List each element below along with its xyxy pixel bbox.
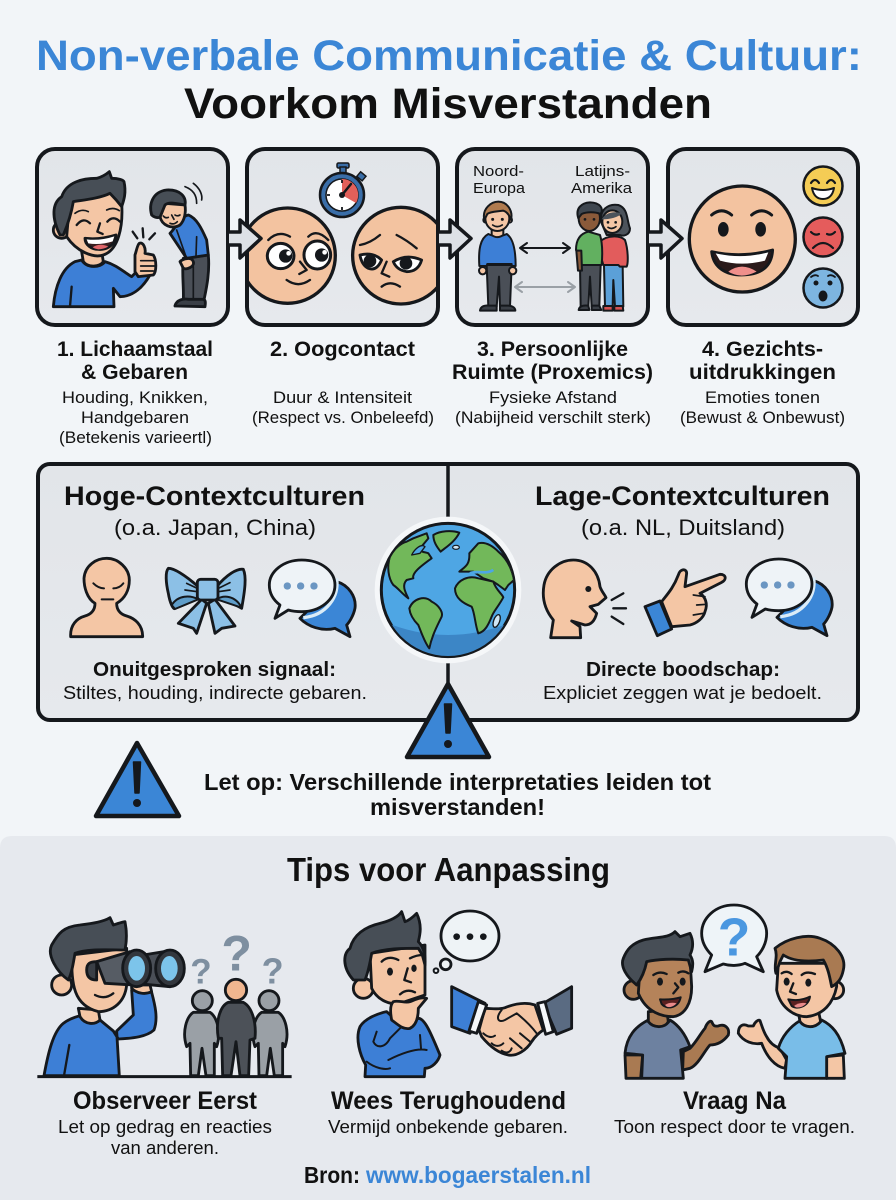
icon: ribbon bow [166, 568, 245, 633]
icon: warning triangle left [96, 743, 179, 816]
panel 3: personal space illustration [457, 149, 648, 325]
tip 1 illustration: observing with binoculars [37, 918, 292, 1077]
arrow: 2 to 3 [439, 220, 471, 258]
icon: handshake [452, 987, 572, 1055]
caption 3: Persoonlijke Ruimte: Fysieke Afstand [489, 389, 617, 407]
caption 4: Gezichtsuitdrukkingen [680, 338, 845, 427]
icon: right person [738, 936, 845, 1078]
arrow: larger distance [515, 282, 575, 292]
icon: pointing hand [645, 570, 725, 636]
heading: high context: (o.a. Japan, China) [114, 515, 316, 540]
tip 2 text: Vermijd onbekende gebaren. [328, 1117, 568, 1137]
title: Voorkom Misverstanden [184, 80, 712, 128]
tip 2 text: Wees Terughoudend [331, 1087, 566, 1115]
icon: question speech bubble [702, 905, 767, 972]
icon: speaking head [543, 560, 626, 638]
source line: www.bogaerstalen.nl [365, 1162, 591, 1188]
tip 1 text: van anderen. [111, 1138, 219, 1158]
caption 4: Gezichtsuitdrukkingen: Emoties tonen [705, 389, 820, 407]
arrow: 1 to 2 [229, 220, 261, 258]
icon: chat bubbles right [746, 559, 832, 636]
warning text: Let op: Verschillende interpretaties leiden tot [204, 769, 711, 795]
icon: surprised emoji [804, 268, 842, 308]
icon: big laughing face [689, 186, 795, 292]
text: low context message: Expliciet zeggen wat je bedoelt. [543, 683, 822, 703]
icon: person standing alone [479, 202, 516, 311]
label: Noord-Europa [473, 163, 526, 197]
icon: left person [622, 932, 729, 1078]
label: Noord-Europa: Noord- [473, 163, 524, 180]
icon: group of people with question marks: ? [262, 950, 284, 991]
caption 4: Gezichtsuitdrukkingen: 4. Gezichts- [702, 338, 823, 361]
icon: bowing person [151, 183, 209, 307]
caption 2: Oogcontact [252, 338, 434, 427]
tip 1 text: Let op gedrag en reacties [58, 1117, 272, 1137]
heading: high context: Hoge-Contextculturen [64, 481, 365, 511]
icon: warning triangle center [407, 684, 489, 757]
icon: group of people with question marks: ? [190, 952, 212, 991]
heading: tips: Tips voor Aanpassing [287, 851, 610, 888]
caption 1: Lichaamstaal & Gebaren: Handgebaren [81, 409, 189, 427]
caption 3: Persoonlijke Ruimte [452, 338, 653, 427]
label: Noord-Europa: Europa [473, 180, 526, 197]
heading: high context [64, 481, 365, 540]
text: high context signal: Stiltes, houding, indirecte gebaren. [63, 683, 367, 703]
icon: globe [375, 517, 521, 663]
icon: two faces [240, 207, 449, 304]
heading: low context [535, 481, 830, 540]
icon: close couple [576, 202, 630, 311]
panel 4: facial expressions illustration [668, 149, 858, 325]
icon: chat bubbles left [269, 560, 355, 637]
tip 3 text: Toon respect door te vragen. [614, 1117, 855, 1137]
caption 2: Oogcontact: Duur & Intensiteit [273, 389, 412, 407]
panel 2: eye contact illustration [240, 149, 449, 325]
caption 4: Gezichtsuitdrukkingen: (Bewust & Onbewust) [680, 409, 845, 427]
tip 1 text: Observeer Eerst [73, 1087, 258, 1115]
icon: thinking man [345, 912, 440, 1077]
icon: question speech bubble: ? [718, 909, 750, 968]
tips background band [0, 836, 896, 1200]
text: low context message [543, 659, 822, 703]
panel 1: body language illustration [37, 149, 228, 325]
icon: silent person [71, 558, 143, 637]
heading: low context: (o.a. NL, Duitsland) [581, 515, 785, 540]
warning text: misverstanden! [370, 794, 545, 820]
icon: happy emoji [804, 166, 842, 206]
caption 3: Persoonlijke Ruimte: Ruimte (Proxemics) [452, 361, 653, 384]
caption 1: Lichaamstaal & Gebaren [57, 338, 213, 447]
label: Latijns-Amerika: Latijns- [575, 163, 630, 180]
heading: low context: Lage-Contextculturen [535, 481, 830, 511]
text: high context signal [63, 659, 367, 703]
tip 3 illustration: two people asking [622, 905, 845, 1078]
caption 1: Lichaamstaal & Gebaren: (Betekenis varieertl) [59, 429, 212, 447]
caption 2: Oogcontact: (Respect vs. Onbeleefd) [252, 409, 434, 427]
caption 1: Lichaamstaal & Gebaren: 1. Lichaamstaal [57, 338, 213, 361]
label: Latijns-Amerika [571, 163, 633, 197]
title: Non-verbale Communicatie & Cultuur: [36, 32, 862, 80]
icon: stopwatch [320, 163, 366, 217]
caption 2: Oogcontact: 2. Oogcontact [270, 338, 415, 361]
arrow: close distance [520, 243, 570, 253]
icon: thought bubble [434, 911, 499, 973]
warning text [204, 769, 711, 820]
caption 4: Gezichtsuitdrukkingen: uitdrukkingen [689, 361, 836, 384]
tip 1 text [58, 1087, 272, 1158]
icon: group of people with question marks: ? [221, 925, 252, 981]
tip 3 text: Vraag Na [683, 1087, 787, 1115]
caption 3: Persoonlijke Ruimte: 3. Persoonlijke [477, 338, 628, 361]
text: high context signal: Onuitgesproken signaal: [93, 659, 336, 681]
caption 1: Lichaamstaal & Gebaren: Houding, Knikken, [62, 389, 208, 407]
icon: sad emoji [804, 218, 842, 256]
caption 3: Persoonlijke Ruimte: (Nabijheid verschilt sterk) [455, 409, 651, 427]
panel: high and low context cultures [38, 464, 858, 720]
icon: group of people with question marks [185, 925, 287, 1076]
source line: Bron: [304, 1162, 360, 1188]
title [36, 32, 862, 128]
label: Latijns-Amerika: Amerika [571, 180, 633, 197]
tip 3 text [614, 1087, 855, 1137]
icon: man with binoculars [44, 918, 184, 1076]
caption 1: Lichaamstaal & Gebaren: & Gebaren [81, 361, 188, 384]
panel border [247, 149, 438, 325]
arrow: 3 to 4 [649, 220, 682, 258]
icon: smiling man with thumbs up [53, 172, 156, 307]
tip 2 text [328, 1087, 568, 1137]
text: low context message: Directe boodschap: [586, 659, 780, 681]
tip 2 illustration: reserved, thinking man and handshake [345, 911, 572, 1077]
